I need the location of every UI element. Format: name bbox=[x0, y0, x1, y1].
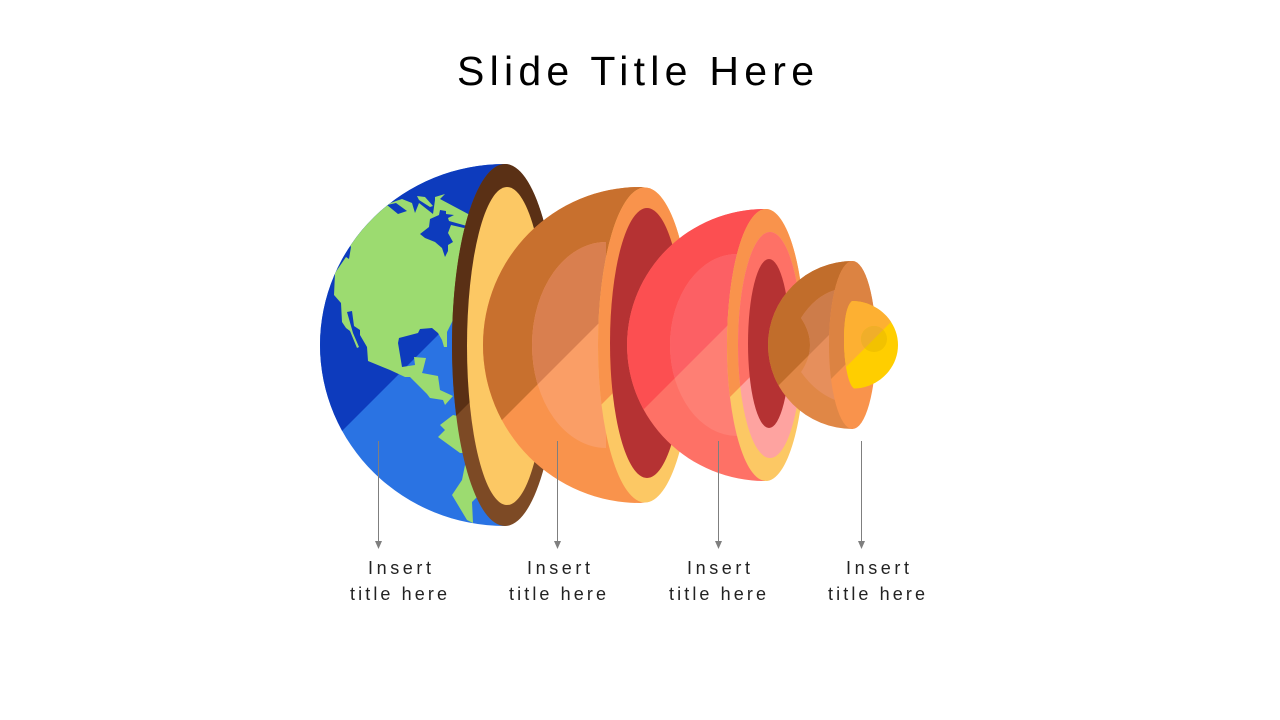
label 1: Insert bbox=[368, 558, 431, 578]
arrow 2 bbox=[554, 441, 561, 549]
arrow 4 bbox=[858, 441, 865, 549]
label 3 bbox=[669, 558, 766, 604]
label 4: title here bbox=[828, 584, 925, 604]
arrow 1 bbox=[375, 441, 382, 549]
label 2 bbox=[509, 558, 606, 604]
label 1 bbox=[350, 558, 447, 604]
upper mantle layer bbox=[483, 187, 692, 503]
continents bbox=[334, 194, 480, 523]
label 2: title here bbox=[509, 584, 606, 604]
inner core bbox=[844, 301, 898, 388]
label 2: Insert bbox=[527, 558, 590, 578]
label 1: title here bbox=[350, 584, 447, 604]
title: Slide Title Here bbox=[457, 48, 814, 94]
arrow 3 bbox=[715, 441, 722, 549]
label 4: Insert bbox=[846, 558, 909, 578]
crust cross-section ring bbox=[452, 164, 544, 526]
label 3: title here bbox=[669, 584, 766, 604]
outer core layer bbox=[768, 261, 876, 429]
label 3: Insert bbox=[687, 558, 750, 578]
earth crust: globe hemisphere bbox=[320, 164, 505, 526]
label 4 bbox=[828, 558, 925, 604]
lower mantle layer bbox=[627, 209, 805, 481]
